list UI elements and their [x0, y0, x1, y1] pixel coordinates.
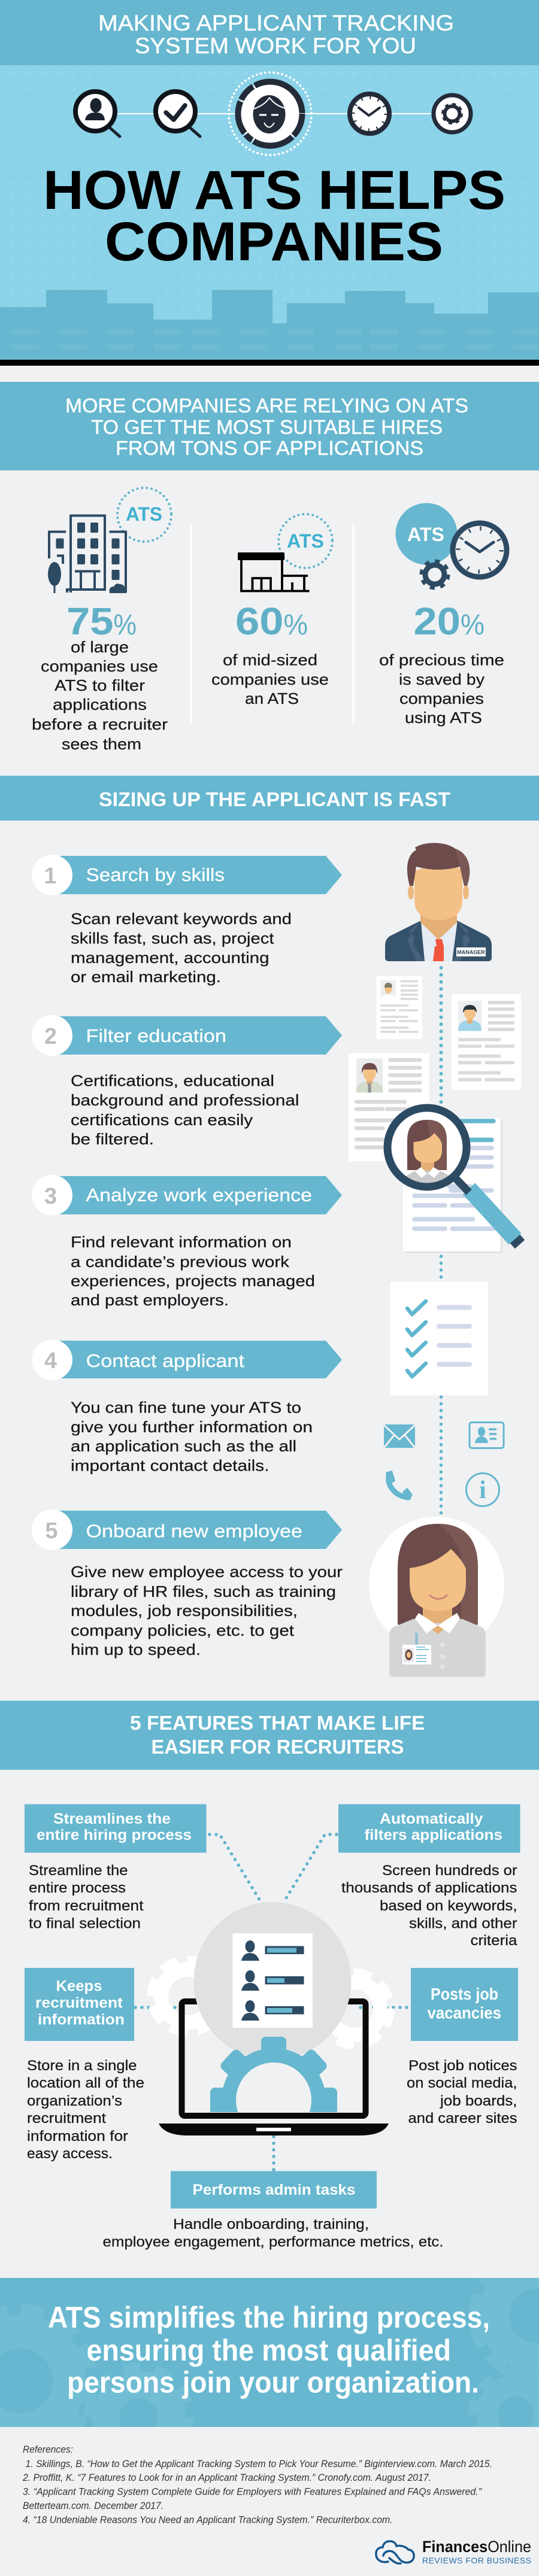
icon: office buildings: [48, 516, 126, 593]
step 2: certifications can easily: [71, 1111, 253, 1129]
feature: automatically filters: filters applications: [364, 1827, 502, 1843]
icon: gear: [434, 95, 471, 132]
illustration: new employee: [369, 1517, 504, 1677]
stat 20%: companies: [399, 689, 484, 707]
stat 20%: 20: [413, 600, 461, 643]
step 2: 2: [44, 1024, 57, 1049]
decorative gears: [0, 2278, 539, 2427]
step 5: Give new employee access to your: [71, 1563, 343, 1581]
logo: FinancesOnline: FinancesOnline: [422, 2538, 531, 2556]
step 4: give you further information on: [71, 1418, 313, 1436]
illustration: manager: [385, 843, 492, 961]
icon: ATS badge large companies: ATS: [126, 503, 162, 525]
icon: magnifier with person: [75, 92, 120, 136]
logo: FinancesOnline: [376, 2538, 531, 2565]
feature: streamlines: entire hiring process: [37, 1827, 192, 1843]
step 3: Find relevant information on: [71, 1233, 292, 1251]
laptop: [159, 2001, 389, 2135]
step 4: You can fine tune your ATS to: [71, 1398, 301, 1416]
feature: automatically filters: criteria: [471, 1933, 517, 1949]
conclusion band: persons join your organization.: [67, 2365, 479, 2399]
illustration: laptop and resume ranking: [152, 1902, 390, 2145]
references: 2. Proffitt, K. “7 Features to Look for in an Applicant Tracking System.” Cronofy.com. August 2017.: [22, 2472, 431, 2483]
step 1: [32, 855, 342, 986]
icon: phone: [386, 1471, 412, 1500]
feature: posts job vacancies: [407, 1968, 518, 2127]
stat 75%: sees them: [62, 735, 141, 753]
feature: automatically filters: thousands of applications: [341, 1880, 517, 1896]
feature: keeps recruitment information: recruitment: [35, 1994, 123, 2011]
stat 75%: of large: [71, 638, 129, 656]
illustration: highlighted resume: [403, 1118, 502, 1253]
step 1: Scan relevant keywords and: [71, 910, 292, 928]
icon: ATS badge mid-sized companies: [278, 514, 332, 568]
feature: streamlines: entire process: [29, 1880, 126, 1896]
step 4: important contact details.: [71, 1457, 270, 1475]
step 3: 3: [44, 1184, 57, 1209]
references: 3. “Applicant Tracking System Complete Guide for Employers with Features Explained and FAQs Answered.”: [23, 2486, 482, 2497]
step 2: [32, 1015, 342, 1148]
step 2: be filtered.: [71, 1130, 154, 1148]
icon: id card: [470, 1422, 504, 1448]
heading band: [0, 1701, 539, 1770]
feature: keeps recruitment information: information for: [27, 2128, 128, 2144]
stat 20%: [379, 600, 504, 727]
step 2: background and professional: [71, 1091, 299, 1109]
panel: companies relying on ATS: [0, 382, 539, 753]
heading band: [0, 382, 539, 470]
feature: streamlines: [25, 1804, 206, 1932]
dotted links: [135, 1834, 409, 2171]
illustration: resume 3: [349, 1053, 429, 1161]
feature: posts job vacancies: vacancies: [428, 2004, 501, 2022]
icon: ATS badge mid-sized companies: ATS: [287, 530, 324, 552]
step 2: Certifications, educational: [71, 1071, 274, 1089]
title: HOW ATS HELPS: [43, 160, 505, 221]
stat 20%: %: [461, 609, 485, 641]
candidate ranking sheet: [232, 1933, 313, 2028]
icon: clock: [350, 94, 389, 133]
subtitle band: SYSTEM WORK FOR YOU: [135, 34, 416, 58]
step 5: modules, job responsibilities,: [71, 1602, 298, 1620]
references: [22, 2444, 492, 2526]
illustration: resume 1: [376, 976, 422, 1039]
step 5: [32, 1509, 343, 1658]
stat 60%: %: [284, 609, 308, 641]
icon: ATS clock and gear: [395, 503, 507, 588]
connector line: [117, 113, 431, 114]
grey circle: [194, 1902, 351, 2060]
feature: streamlines: from recruitment: [29, 1898, 144, 1914]
step 3: Analyze work experience: [86, 1184, 312, 1205]
feature: keeps recruitment information: easy access.: [27, 2146, 113, 2162]
step 5: 5: [45, 1518, 58, 1544]
heading band: EASIER FOR RECRUITERS: [151, 1736, 404, 1758]
illustration: resume 2: [452, 994, 521, 1090]
feature: performs admin tasks: Performs admin tasks: [193, 2182, 356, 2198]
stat 20%: of precious time: [379, 651, 504, 669]
stat 75%: [32, 600, 168, 753]
feature: streamlines: to final selection: [29, 1915, 141, 1932]
feature: keeps recruitment information: recruitment: [27, 2110, 106, 2127]
feature: performs admin tasks: [103, 2171, 443, 2250]
feature: performs admin tasks: employee engagement, performance metrics, etc.: [103, 2234, 443, 2250]
step 3: [32, 1175, 342, 1309]
stat 20%: using ATS: [405, 709, 482, 727]
heading band: FROM TONS OF APPLICATIONS: [116, 437, 423, 459]
dotted connectors: [440, 968, 443, 1517]
title: [43, 160, 505, 272]
stat 75%: 75: [66, 600, 114, 643]
icon: small store: [238, 552, 309, 591]
white background gears: [152, 1960, 390, 2045]
icon: applicant face: [229, 72, 311, 155]
feature: keeps recruitment information: Keeps: [56, 1977, 102, 1994]
step 4: [32, 1339, 342, 1475]
feature: automatically filters: Automatically: [380, 1811, 483, 1827]
conclusion band: [0, 2278, 539, 2427]
feature: automatically filters: skills, and other: [409, 1915, 517, 1932]
step 1: or email marketing.: [71, 968, 221, 986]
references: References:: [23, 2444, 73, 2455]
step 1: management, accounting: [71, 949, 270, 967]
stat 75%: applications: [53, 695, 147, 713]
stat 20%: is saved by: [399, 670, 485, 688]
subtitle band: MAKING APPLICANT TRACKING: [98, 11, 454, 35]
references: 4. “18 Undeniable Reasons You Need an Applicant Tracking System.” Recuriterbox.com.: [23, 2514, 393, 2526]
panel: 5 features: [0, 1701, 539, 2250]
illustration: checklist: [390, 1282, 487, 1396]
feature: posts job vacancies: Posts job: [431, 1985, 498, 2003]
stat 60%: companies use: [211, 670, 329, 688]
header: [0, 0, 539, 366]
feature: keeps recruitment information: Store in a single: [27, 2058, 137, 2074]
heading band: [0, 776, 539, 821]
stat 60%: an ATS: [245, 689, 299, 707]
references: Betterteam.com. December 2017.: [23, 2500, 163, 2511]
feature: streamlines: Streamlines the: [53, 1811, 171, 1827]
heading band: TO GET THE MOST SUITABLE HIRES: [91, 416, 443, 438]
feature: performs admin tasks: Handle onboarding, training,: [173, 2216, 369, 2232]
step 1: Search by skills: [86, 864, 225, 885]
skyline: [0, 290, 539, 360]
stat 75%: companies use: [41, 657, 158, 675]
stat 75%: %: [114, 609, 137, 641]
stat 60%: of mid-sized: [223, 651, 317, 669]
step 4: Contact applicant: [86, 1350, 244, 1371]
stat 75%: before a recruiter: [32, 715, 168, 733]
feature: streamlines: Streamline the: [29, 1863, 128, 1879]
step 5: company policies, etc. to get: [71, 1621, 295, 1639]
step 1: 1: [44, 864, 57, 889]
feature: posts job vacancies: Post job notices: [408, 2058, 517, 2074]
step 4: 4: [44, 1348, 57, 1374]
icon: magnifier with check: [156, 92, 200, 136]
subtitle band: [0, 0, 539, 65]
blue gear: [210, 2037, 337, 2112]
illustration: magnifier with candidate: [387, 1108, 520, 1244]
feature: keeps recruitment information: [25, 1968, 144, 2162]
icon: mail: [384, 1424, 415, 1448]
heading band: MORE COMPANIES ARE RELYING ON ATS: [65, 394, 468, 417]
references: 1. Skillings, B. “How to Get the Applicant Tracking System to Pick Your Resume.” Biginterview.com. March 2015.: [25, 2458, 492, 2469]
panel: sizing up the applicant: [0, 776, 539, 1677]
feature: automatically filters: Screen hundreds or: [382, 1863, 517, 1879]
icon: info: i: [479, 1477, 486, 1504]
step 4: an application such as the all: [71, 1437, 296, 1455]
step 5: him up to speed.: [71, 1641, 201, 1658]
illustration: manager: MANAGER: [457, 949, 485, 955]
heading band: SIZING UP THE APPLICANT IS FAST: [99, 788, 450, 810]
title: COMPANIES: [105, 211, 443, 272]
step 1: skills fast, such as, project: [71, 929, 274, 947]
heading band: 5 FEATURES THAT MAKE LIFE: [130, 1712, 425, 1734]
black ground strip: [0, 360, 539, 366]
feature: automatically filters: based on keywords,: [380, 1898, 517, 1914]
icon: ATS clock and gear: ATS: [407, 524, 444, 545]
step 5: Onboard new employee: [86, 1520, 302, 1542]
feature: keeps recruitment information: information: [38, 2011, 125, 2028]
stat 60%: [211, 600, 329, 707]
feature: posts job vacancies: on social media,: [407, 2075, 517, 2091]
logo: FinancesOnline: REVIEWS FOR BUSINESS: [422, 2556, 531, 2565]
feature: posts job vacancies: and career sites: [408, 2110, 517, 2127]
conclusion band: ensuring the most qualified: [86, 2334, 451, 2367]
feature: automatically filters: [338, 1804, 520, 1949]
feature: posts job vacancies: job boards,: [440, 2093, 517, 2109]
step 5: library of HR files, such as training: [71, 1582, 336, 1600]
step 3: a candidate’s previous work: [71, 1253, 290, 1271]
feature: keeps recruitment information: location all of the: [27, 2075, 144, 2091]
step 3: and past employers.: [71, 1291, 229, 1309]
conclusion band: ATS simplifies the hiring process,: [48, 2301, 490, 2334]
feature: keeps recruitment information: organization’s: [27, 2093, 122, 2109]
step 3: experiences, projects managed: [71, 1272, 315, 1290]
icon: info: [466, 1474, 499, 1506]
stat 75%: ATS to filter: [54, 676, 145, 694]
stat 60%: 60: [235, 600, 284, 643]
icon: ATS badge large companies: [117, 488, 171, 542]
step 2: Filter education: [86, 1025, 226, 1046]
